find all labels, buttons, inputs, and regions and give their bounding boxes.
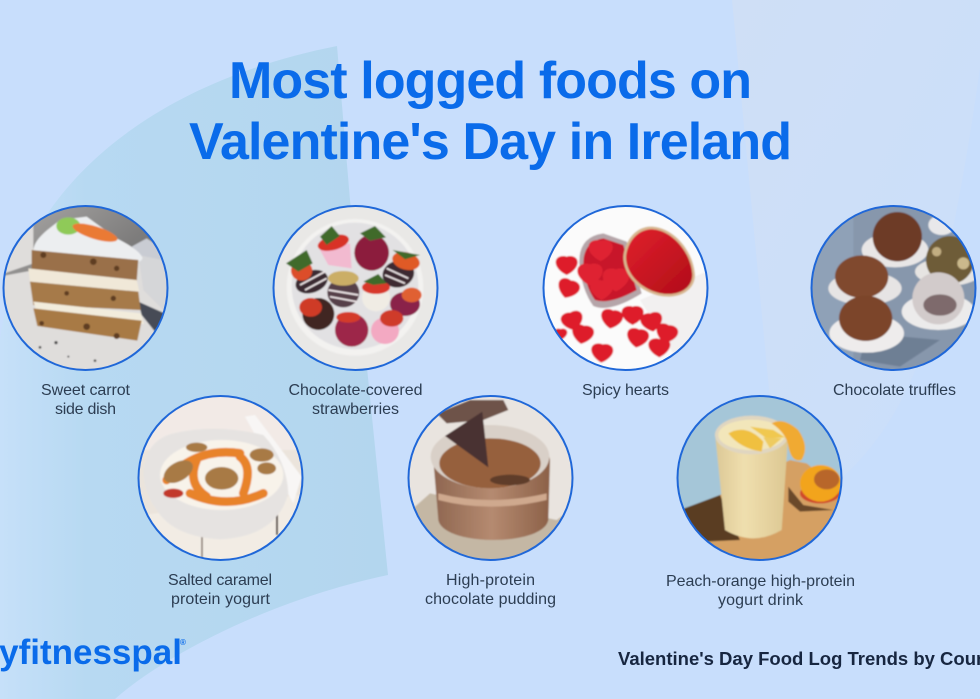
caption: Spicy hearts <box>582 382 669 399</box>
logo registered mark: ® <box>180 638 186 647</box>
title: Valentine's Day in Ireland <box>189 113 792 171</box>
food item: salted caramel protein yogurt <box>138 395 304 608</box>
photo: chocolate pudding jar <box>410 397 572 559</box>
caption: side dish <box>55 401 116 418</box>
food item: peach-orange high-protein yogurt drink <box>666 387 855 609</box>
photo: carrot cake slice <box>4 207 166 369</box>
caption: Chocolate truffles <box>833 382 956 399</box>
caption: Chocolate-covered <box>288 382 422 399</box>
ring <box>678 396 842 560</box>
food item: high-protein chocolate pudding <box>408 395 574 608</box>
photo: yogurt bowl <box>140 397 302 559</box>
caption: protein yogurt <box>171 591 271 608</box>
photo: peach smoothie glass <box>678 397 840 559</box>
food item: chocolate-covered strawberries <box>272 205 438 414</box>
caption: yogurt drink <box>718 592 804 609</box>
title: Most logged foods on <box>229 52 752 110</box>
title <box>189 52 792 171</box>
ring <box>4 206 168 370</box>
caption: chocolate pudding <box>425 591 556 608</box>
food item: sweet carrot side dish <box>2 205 168 414</box>
caption: Sweet carrot <box>41 382 131 399</box>
photo: strawberries on plate <box>274 207 436 369</box>
caption: High-protein <box>446 572 535 589</box>
ring <box>812 206 976 370</box>
food item: spicy hearts <box>542 205 708 398</box>
caption: Salted caramel <box>168 572 272 589</box>
ring <box>274 206 438 370</box>
photo: truffles in paper cups <box>812 207 974 369</box>
ring <box>138 396 302 560</box>
caption: Peach-orange high-protein <box>666 573 855 590</box>
photo: red candy hearts and tin <box>544 207 706 369</box>
ring <box>544 206 708 370</box>
ring <box>408 396 572 560</box>
food item: chocolate truffles <box>810 205 976 395</box>
caption: strawberries <box>312 401 399 418</box>
